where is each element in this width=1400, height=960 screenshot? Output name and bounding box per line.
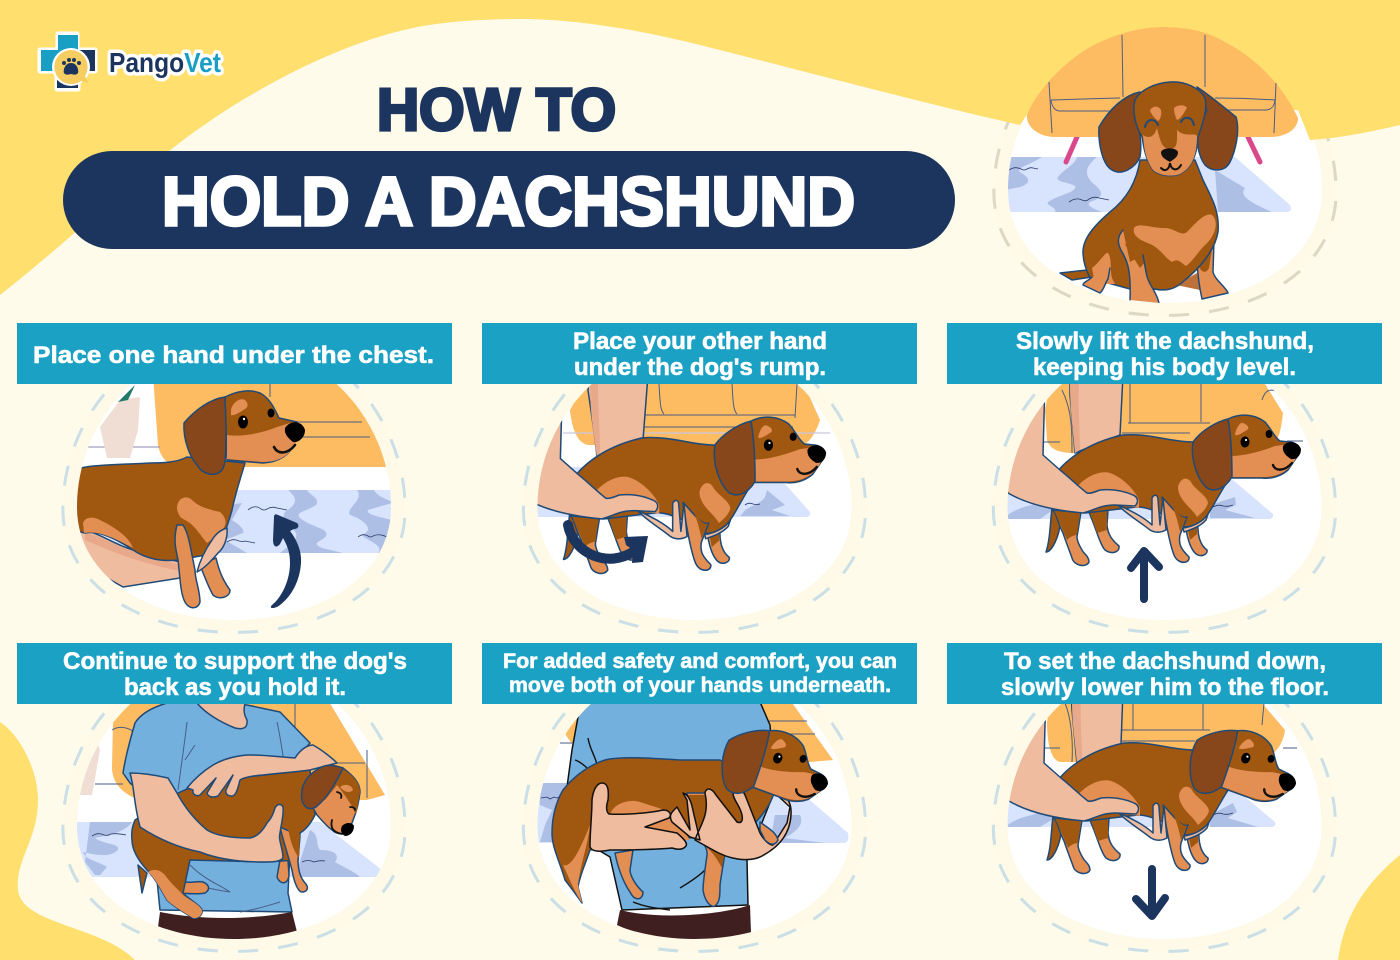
banner: step 3: keeping his body level. <box>1033 354 1296 381</box>
dashed ring <box>63 332 405 632</box>
banner: step 2: under the dog's rump. <box>574 354 826 381</box>
dog body, arm and hands <box>538 416 826 574</box>
banner: step 5: move both of your hands underneath. <box>509 674 891 697</box>
dashed ring <box>523 332 866 632</box>
body <box>1083 160 1218 290</box>
belt <box>158 912 297 941</box>
step 3 panel: slowly lift the dachshund <box>992 384 1337 634</box>
dog body <box>132 770 315 918</box>
illustration <box>60 650 410 950</box>
banner: step 2 <box>482 323 917 384</box>
illustration <box>77 384 391 620</box>
banner: step 3 <box>947 323 1382 384</box>
illustration: sitting dachshund on sofa <box>1027 27 1298 303</box>
illustration <box>530 650 880 950</box>
banner: step 2: Place your other hand <box>573 328 827 355</box>
ears <box>1099 92 1141 172</box>
supporting fingers <box>197 528 227 572</box>
near leg <box>175 525 200 608</box>
haunch marking <box>1092 253 1115 284</box>
illustration <box>1008 384 1322 620</box>
tail <box>1060 270 1092 280</box>
banner: step 4: back as you hold it. <box>124 674 346 701</box>
step 4 panel: continue to support the dog's back <box>60 650 410 951</box>
muzzle <box>227 423 296 462</box>
belly marking <box>610 801 690 843</box>
head <box>225 391 297 463</box>
neck <box>197 703 247 729</box>
person's leg <box>588 375 648 457</box>
top arm and hand <box>187 745 337 797</box>
banner: step 5: For added safety and comfort, you can <box>503 650 897 673</box>
banner: step 6 <box>947 643 1382 704</box>
dashed ring: intro <box>994 15 1336 315</box>
dog body, arm and hands <box>1001 688 1231 873</box>
dog head <box>712 715 840 822</box>
dog head markings <box>320 769 360 815</box>
tail marking <box>563 825 590 903</box>
dog tail and back legs <box>138 865 147 893</box>
closed eyes <box>1145 118 1194 127</box>
white blob: intro <box>1008 27 1322 303</box>
title pill: HOLD A DACHSHUND: HOLD A DACHSHUND <box>162 163 855 240</box>
belt <box>617 905 751 941</box>
near front leg <box>687 793 727 906</box>
banner: step 3: Slowly lift the dachshund, <box>1016 328 1314 355</box>
back marking <box>83 518 133 548</box>
dog head <box>1180 715 1308 822</box>
front leg <box>1118 230 1159 303</box>
step 6 panel: slowly lower him to the floor <box>993 650 1340 951</box>
dog head <box>313 768 360 834</box>
banner: step 6: slowly lower him to the floor. <box>1001 674 1329 701</box>
step 1 panel: place one hand under the chest <box>61 384 406 634</box>
dog near front leg <box>280 827 307 892</box>
banner: step 6: To set the dachshund down, <box>1004 648 1326 675</box>
title: HOW TO: HOW TO <box>377 77 616 143</box>
illustration <box>538 384 852 620</box>
holding arm <box>130 773 283 862</box>
dog body <box>552 758 775 903</box>
sofa legs <box>1066 137 1260 162</box>
step 2 panel: place your other hand under the rump <box>522 384 867 634</box>
shirt <box>565 695 775 910</box>
title pill: HOLD A DACHSHUND <box>63 151 955 249</box>
person's leg <box>1071 690 1123 764</box>
illustration <box>1000 650 1340 950</box>
dog head <box>1192 415 1301 490</box>
far front leg <box>1197 240 1228 299</box>
arrow: rotate under <box>568 525 636 559</box>
arrow: down <box>1136 869 1165 916</box>
dashed ring <box>993 651 1336 951</box>
back paw <box>1083 268 1110 293</box>
dashed ring <box>993 332 1336 632</box>
rear leg <box>615 850 643 899</box>
head <box>1134 82 1206 176</box>
banner: step 4: Continue to support the dog's <box>63 648 407 675</box>
dashed ring <box>63 651 405 951</box>
muzzle <box>1143 128 1197 176</box>
dog body, arm and hands <box>1008 402 1226 566</box>
arrow: up <box>1131 551 1159 599</box>
arrow: curved up <box>271 514 301 608</box>
banner: step 1: Place one hand under the chest. <box>33 342 434 369</box>
left hand <box>590 783 686 851</box>
sofa <box>1027 27 1298 137</box>
right haunch shadow <box>1179 273 1200 290</box>
right hand <box>670 789 791 860</box>
far paw <box>760 822 778 844</box>
banner: step 1 <box>17 323 452 384</box>
step 5 panel: move both hands underneath <box>523 650 880 951</box>
shirt <box>123 703 310 912</box>
banner: step 5 <box>482 643 917 704</box>
far leg <box>200 558 230 598</box>
body <box>70 457 245 561</box>
logo: PangoVet <box>40 34 221 89</box>
chest marking <box>177 497 226 543</box>
wordmark: PangoVet <box>109 47 221 78</box>
banner: step 4 <box>17 643 452 704</box>
illustration base: intro rug <box>1000 157 1291 212</box>
icon: medical cross with paw <box>40 34 95 89</box>
arm beneath dog <box>75 528 180 587</box>
dashed ring <box>523 651 866 951</box>
dog rear marking <box>148 870 202 918</box>
chest marking <box>1134 215 1216 266</box>
brows <box>1150 105 1187 121</box>
person's leg <box>1070 375 1123 453</box>
nose and smile <box>1161 148 1178 162</box>
